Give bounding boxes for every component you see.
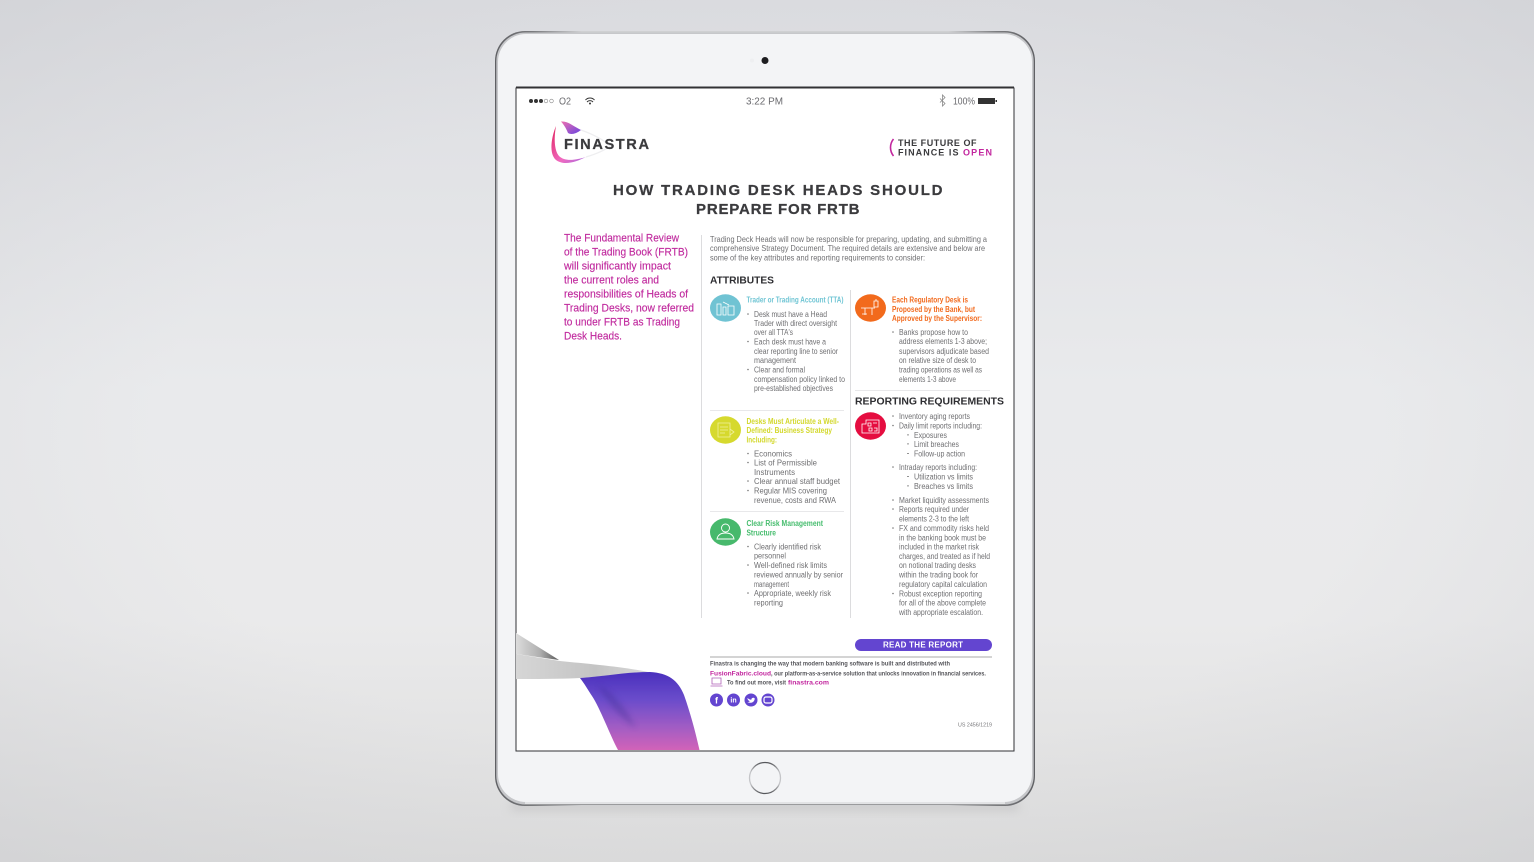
reporting requirements list: Limit breaches xyxy=(914,440,959,449)
screen xyxy=(516,86,1014,751)
attribute: regulatory desk xyxy=(855,294,989,384)
attribute: trader or trading account: clear reporting line to senior xyxy=(754,347,838,356)
attribute: business strategy: Economics xyxy=(754,450,792,458)
tablet device xyxy=(495,31,1035,810)
icon: green person xyxy=(710,518,741,546)
attribute: regulatory desk: Approved by the Supervisor: xyxy=(892,314,982,323)
reporting requirements list: for all of the above complete xyxy=(899,598,986,608)
attribute: risk management: management xyxy=(754,580,790,589)
intro text: some of the key attributes and reporting requirements to consider: xyxy=(710,254,925,262)
attribute: trader or trading account: Clear and formal xyxy=(754,366,805,374)
footer text: Finastra is changing the way that modern banking software is built and distributed with xyxy=(710,662,950,668)
attribute: business strategy: Regular MIS covering xyxy=(754,486,827,496)
attribute: trader or trading account xyxy=(710,294,845,393)
attribute: business strategy xyxy=(710,416,841,505)
reporting requirements list: Exposures xyxy=(914,431,947,440)
status bar: O2 xyxy=(559,96,571,108)
attribute: trader or trading account: compensation policy linked to xyxy=(754,375,845,384)
attribute: business strategy: Defined: Business Strategy xyxy=(746,426,832,435)
reporting requirements list: FX and commodity risks held xyxy=(899,524,989,533)
social icons xyxy=(710,694,774,706)
attribute: regulatory desk: supervisors adjudicate based xyxy=(899,347,989,356)
camera xyxy=(750,57,768,64)
title xyxy=(613,182,943,218)
lead paragraph: responsibilities of Heads of xyxy=(564,288,689,300)
footer text: FusionFabric.cloud xyxy=(710,671,771,677)
attribute: trader or trading account: over all TTA's xyxy=(754,328,793,337)
document code: US 2456/1219 xyxy=(958,722,992,728)
logo xyxy=(551,121,649,163)
intro text: comprehensive Strategy Document. The required details are extensive and below are xyxy=(710,244,985,253)
lead paragraph: Desk Heads. xyxy=(564,330,622,342)
reporting requirements list: in the banking book must be xyxy=(899,534,986,542)
status bar: 100% xyxy=(953,96,975,108)
reporting requirements list: Utilization vs limits xyxy=(914,472,973,482)
social icons: f xyxy=(715,696,719,706)
lead paragraph xyxy=(563,232,694,342)
tagline: THE FUTURE OF xyxy=(898,138,977,148)
attribute: trader or trading account: management xyxy=(754,356,797,365)
attribute: business strategy: revenue, costs and RWA xyxy=(754,496,837,505)
attribute: business strategy: Including: xyxy=(746,436,777,444)
attribute: regulatory desk: Each Regulatory Desk is xyxy=(892,296,968,304)
reporting requirements list: Intraday reports including: xyxy=(899,463,977,472)
ribbon graphic xyxy=(516,633,700,750)
tagline: OPEN xyxy=(963,147,992,157)
attribute: business strategy: Desks Must Articulate a Well- xyxy=(746,417,839,426)
attribute: risk management: reviewed annually by senior xyxy=(754,570,843,580)
icon: yellow document xyxy=(710,416,741,444)
heading: attributes: ATTRIBUTES xyxy=(710,274,774,286)
title: PREPARE FOR FRTB xyxy=(696,201,860,218)
icon: red newspaper xyxy=(855,412,886,440)
lead paragraph: The Fundamental Review xyxy=(564,232,679,244)
attribute: regulatory desk: on relative size of desk to xyxy=(899,356,976,365)
attribute: risk management xyxy=(710,518,843,608)
reporting requirements list: Inventory aging reports xyxy=(899,412,970,421)
attribute: regulatory desk: Proposed by the Bank, but xyxy=(892,305,975,314)
reporting requirements list: Market liquidity assessments xyxy=(899,496,989,505)
attribute: business strategy: List of Permissible xyxy=(754,458,818,468)
attribute: risk management: reporting xyxy=(754,598,783,608)
lead paragraph: to under FRTB as Trading xyxy=(564,316,680,328)
lead paragraph: of the Trading Book (FRTB) xyxy=(564,246,688,258)
reporting requirements list: Follow-up action xyxy=(914,450,965,458)
attribute: regulatory desk: Banks propose how to xyxy=(899,328,968,337)
attribute: risk management: Appropriate, weekly risk xyxy=(754,589,832,598)
attribute: risk management: personnel xyxy=(754,552,786,560)
logo: FINASTRA xyxy=(564,137,649,153)
title: HOW TRADING DESK HEADS SHOULD xyxy=(613,182,943,199)
reporting requirements list: on notional trading desks xyxy=(899,561,976,570)
heading: reporting requirements: REPORTING REQUIREMENTS xyxy=(855,396,1004,408)
status bar: 3:22 PM xyxy=(746,96,783,108)
reporting requirements list: within the trading book for xyxy=(898,570,978,580)
lead paragraph: will significantly impact xyxy=(563,260,671,272)
status bar xyxy=(529,95,997,108)
footer text xyxy=(710,662,986,686)
attribute: business strategy: Clear annual staff budget xyxy=(754,477,841,486)
attribute: business strategy: Instruments xyxy=(754,468,795,477)
attribute: risk management: Clearly identified risk xyxy=(754,542,822,552)
footer text: To find out more, visit xyxy=(727,680,786,686)
attribute: regulatory desk: address elements 1-3 above; xyxy=(899,337,987,346)
footer text: finastra.com xyxy=(788,680,829,686)
attribute: risk management: Clear Risk Management xyxy=(746,519,823,528)
home button xyxy=(750,762,780,794)
reporting requirements list: included in the market risk xyxy=(899,542,980,552)
tagline xyxy=(890,138,992,157)
reporting requirements list: elements 2-3 to the left xyxy=(899,514,970,524)
lead paragraph: the current roles and xyxy=(564,274,659,286)
attribute: trader or trading account: pre-established objectives xyxy=(754,384,833,393)
reporting requirements list: charges, and treated as if held xyxy=(899,552,990,561)
footer text: , our platform-as-a-service solution that unlocks innovation in financial services. xyxy=(771,671,986,677)
attribute: trader or trading account: Each desk must have a xyxy=(754,338,826,346)
reporting requirements list: Daily limit reports including: xyxy=(899,422,982,430)
column dividers xyxy=(701,235,990,618)
button: read the report xyxy=(855,639,992,651)
attribute: risk management: Well-defined risk limits xyxy=(754,561,827,570)
button: read the report: READ THE REPORT xyxy=(883,640,963,649)
reporting requirements list: Robust exception reporting xyxy=(899,590,982,598)
social icons: in xyxy=(730,698,737,705)
attribute: trader or trading account: Trader or Trading Account (TTA) xyxy=(746,296,844,304)
icon: teal chart xyxy=(710,294,741,322)
reporting requirements list xyxy=(855,412,990,617)
icon: laptop xyxy=(710,678,722,686)
reporting requirements list: Breaches vs limits xyxy=(914,482,973,491)
reporting requirements list: with appropriate escalation. xyxy=(898,608,983,617)
intro text: Trading Deck Heads will now be responsible for preparing, updating, and submitting a xyxy=(710,235,988,244)
attribute: regulatory desk: elements 1-3 above xyxy=(899,375,956,384)
tagline: FINANCE IS xyxy=(898,147,958,157)
reporting requirements list: regulatory capital calculation xyxy=(899,580,987,589)
icon: orange desk xyxy=(855,294,886,322)
lead paragraph: Trading Desks, now referred xyxy=(564,302,694,314)
attribute: trader or trading account: Desk must have a Head xyxy=(754,310,827,319)
intro text xyxy=(710,235,988,262)
attribute: risk management: Structure xyxy=(746,528,776,538)
reporting requirements list: Reports required under xyxy=(899,505,969,514)
attribute: regulatory desk: trading operations as well as xyxy=(899,366,982,374)
attribute: trader or trading account: Trader with direct oversight xyxy=(754,319,838,328)
